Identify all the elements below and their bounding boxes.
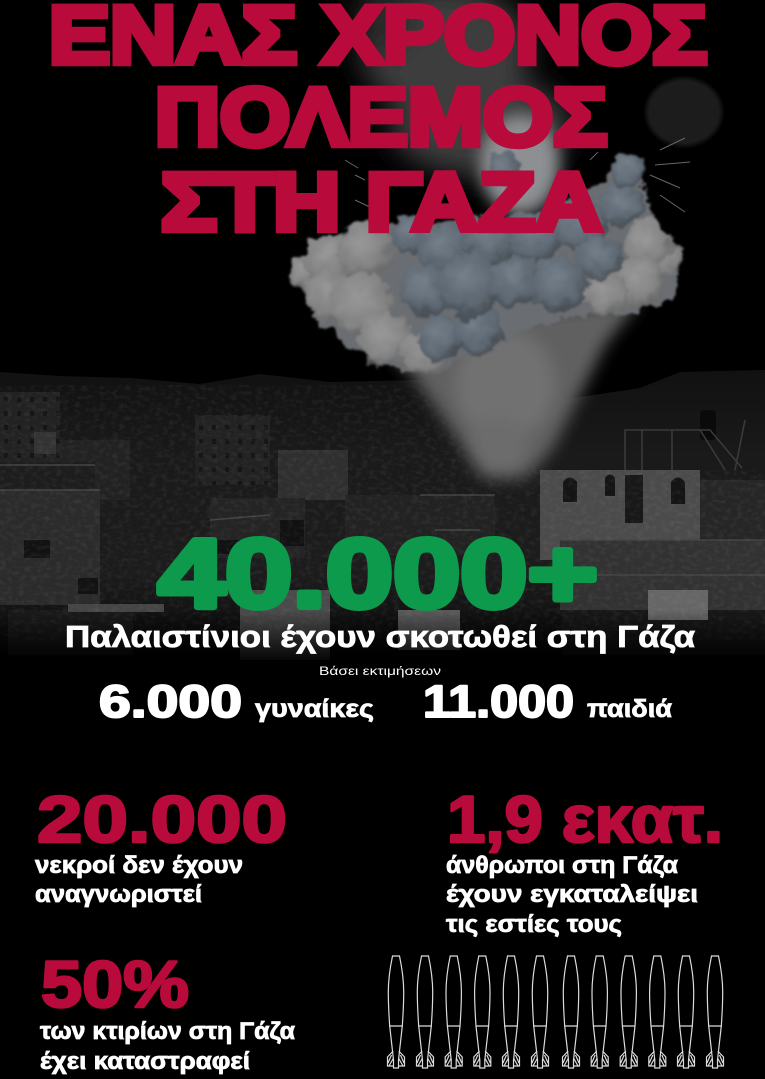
sparks	[345, 138, 690, 212]
title: ΠΟΛΕΜΟΣ	[155, 72, 607, 163]
title: ΣΤΗ ΓΑΖΑ	[161, 157, 602, 248]
children killed: 11.000	[423, 676, 574, 727]
estimates note: Βάσει εκτιμήσεων	[319, 664, 441, 678]
dark side puff	[646, 78, 722, 146]
stat: displaced people: έχουν εγκαταλείψει	[446, 881, 698, 908]
stat: unidentified dead: νεκροί δεν έχουν	[35, 852, 243, 879]
stat: unidentified dead: 20.000	[37, 782, 287, 856]
stat: displaced people: 1,9 εκατ.	[447, 782, 723, 856]
cap silhouette	[292, 170, 680, 372]
stat: unidentified dead	[35, 782, 287, 908]
main statistic caption: Παλαιστίνιοι έχουν σκοτωθεί στη Γάζα	[65, 619, 695, 654]
children killed: παιδιά	[587, 695, 673, 723]
mushroom cap	[289, 152, 681, 376]
building blocks	[0, 392, 765, 660]
city texture	[0, 385, 765, 640]
upper dark smoke	[355, 0, 570, 175]
stat: displaced people: τις εστίες τους	[446, 911, 622, 938]
stat: displaced people: άνθρωποι στη Γάζα	[446, 852, 678, 879]
stat: buildings destroyed	[40, 947, 295, 1075]
women killed: γυναίκες	[255, 695, 374, 723]
main statistic: 40.000+: 40.000+	[158, 519, 598, 628]
stat: unidentified dead: αναγνωριστεί	[35, 881, 202, 908]
stat: buildings destroyed: των κτιρίων στη Γάζα	[40, 1018, 295, 1045]
stat: buildings destroyed: έχει καταστραφεί	[40, 1048, 250, 1075]
women killed: 6.000	[99, 676, 242, 727]
title	[49, 0, 707, 248]
children killed	[423, 676, 673, 727]
stat: buildings destroyed: 50%	[41, 947, 189, 1021]
column	[370, 300, 640, 478]
light plume behind title	[480, 115, 560, 215]
women killed	[99, 676, 374, 727]
explosion smoke	[289, 0, 722, 478]
stat: displaced people	[446, 782, 723, 938]
icon row: bombs	[388, 956, 724, 1068]
city skyline photo	[0, 370, 765, 665]
